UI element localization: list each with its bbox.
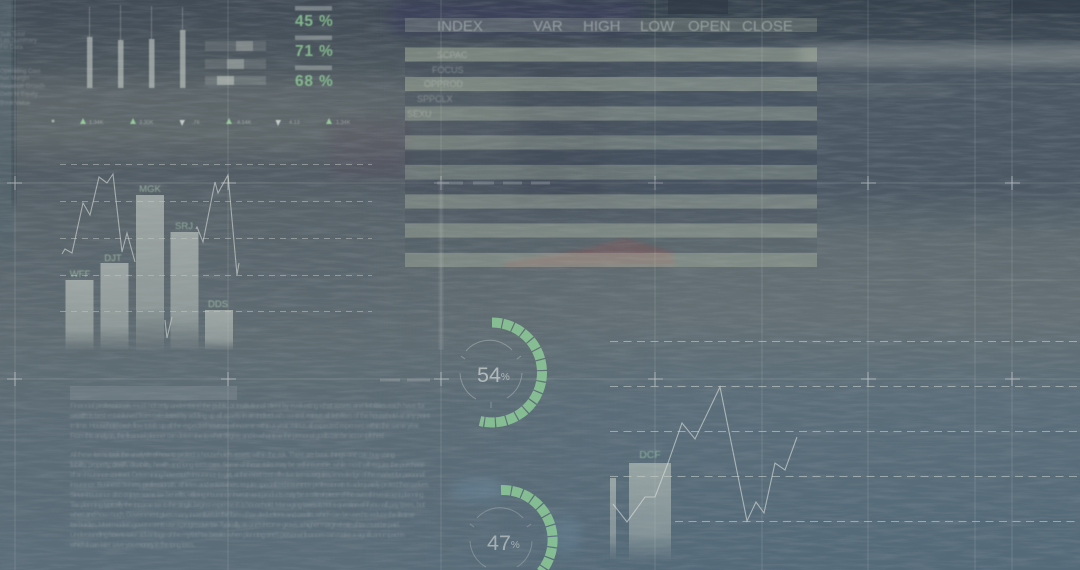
panel: ticker row: .76 [192, 120, 200, 126]
text block: financial planning copy: in time. Household cash flow totals up all the expected sources of income within a year, minus all expected expenses within the same year. [70, 422, 420, 430]
table header: VAR [533, 18, 563, 35]
bar labels: DDS [208, 299, 228, 310]
table row labels: FOCUS [432, 65, 464, 75]
chart: right bar and line chart [610, 342, 1080, 562]
segmented arc [480, 322, 542, 422]
text block: financial planning copy: liability, property, death, disability, health and long-term care. Some of these risks may be self-insurable, while most will require the purchase [70, 461, 425, 469]
gauge value: % [511, 540, 520, 551]
text block: financial planning copy: which it can later save you money in the long term. [69, 541, 195, 549]
panel: ticker row: 1.34K [336, 120, 351, 126]
panel: sidebar faint notes: Las Summary [0, 38, 37, 44]
panel: ticker row [52, 118, 351, 126]
text block: financial planning copy: All these items took the analysis of how to protect a household's assets within the risk. There are basic things one can buy using [70, 451, 395, 459]
text block: financial planning copy: of an insurance contract. Determining how much insurance to get, at the most cost effective terms requires knowledge of the market for personal [70, 471, 425, 479]
panel: percentage readouts [295, 6, 334, 90]
bar labels: DJT [104, 253, 122, 264]
bar labels: MGK [139, 184, 161, 195]
gauge: 54 percent [460, 322, 542, 422]
panel: sidebar faint notes: Fin Data [0, 45, 23, 51]
table header [437, 18, 793, 35]
gauge: 47 percent [470, 490, 553, 570]
table footer dashes [437, 182, 550, 184]
text block: financial planning copy: Since insurance also enjoys some tax benefits, utilizing insurance investment products may be a critical piece of the overall investment planning. [70, 491, 425, 499]
panel: sidebar faint notes: Book Value [0, 101, 31, 107]
panel: ticker row: 3.30K [139, 120, 154, 126]
gauge value: % [501, 372, 510, 383]
bars [610, 463, 671, 562]
text block: financial planning copy: wealth is best established from calculated by adding up all assets in an individual's control, minus all liabilities of the household at any point [69, 412, 430, 420]
text block: financial planning copy: insurance. Business owners, professionals, athletes and entertainers require specialized insurance professionals to adequately protect themselves. [70, 481, 430, 489]
chart: left bar and line chart [60, 164, 372, 350]
table row labels: SCPAC [437, 50, 468, 60]
text block: financial planning copy: From this analysis, the financial planner can determine to what degree and in what time the personal goals can be accomplished. [70, 432, 385, 440]
panel: percentage readouts: 71 % [295, 43, 334, 60]
panel: ticker row: 4.13 [289, 120, 300, 126]
table header: CLOSE [742, 18, 793, 35]
panel: sidebar faint notes: Operating Cost [0, 69, 41, 75]
panel: sidebar faint notes [0, 32, 45, 107]
trend line [62, 174, 239, 338]
text block: financial planning copy: Tax planning typically the income tax is the single largest expense in a household. Managing taxes is not a question of if you will pay taxes, but [70, 501, 425, 509]
text block: financial planning copy: tax burden. Most modern governments use a progressive tax. Typically, as one's income grows, a higher marginal rate of tax must be paid. [70, 521, 400, 529]
panel: sidebar faint notes: Revenue Growth [0, 84, 45, 90]
panel: ticker row: 4.14K [237, 120, 252, 126]
table header: INDEX [437, 18, 483, 35]
table header: OPEN [688, 18, 731, 35]
panel: percentage readouts: 45 % [295, 13, 334, 30]
text block: financial planning copy: when and how much. Government gives many incentives in the form of tax deductions and credits, which can be used to reduce the lifetime [69, 511, 415, 519]
table row labels: OPPROD [424, 79, 464, 89]
gauge value: 47 [487, 531, 511, 555]
text block: financial planning copy [69, 386, 430, 549]
panel: sidebar faint notes: Net Margin [0, 76, 29, 82]
text block: financial planning copy: Understanding how to take advantage of the myriad tax breaks when planning one's personal finances can make a significant impact in [70, 531, 405, 539]
table header: HIGH [583, 18, 620, 35]
table rows [405, 48, 817, 267]
panel: market index table [405, 18, 817, 267]
trend line [613, 387, 797, 522]
bars [66, 195, 233, 350]
panel: sidebar faint notes: Sub Total [0, 32, 25, 38]
bar labels: WFF [70, 269, 90, 280]
panel: horizontal range bars [205, 41, 266, 85]
bar labels [70, 184, 228, 310]
bar labels: SRJ [175, 221, 193, 232]
inner ring [470, 508, 532, 567]
connector dashes beside left gauge [380, 378, 430, 382]
gauge value: 54 [477, 363, 501, 387]
inner ring [460, 340, 522, 408]
table header: LOW [640, 18, 675, 35]
dashed gridlines [610, 342, 1080, 522]
text block: financial planning copy: Financial professionals must not only understand the public or institutional client by evaluating what assets and liabilities each have for [70, 402, 426, 410]
table row labels: SPPCLX [417, 94, 453, 104]
panel: mini column chart [87, 5, 186, 88]
table row labels: SEXU [407, 109, 432, 119]
panel: ticker row: 1.34K [89, 120, 104, 126]
dashed gridlines [60, 164, 372, 312]
panel: percentage readouts: 68 % [295, 73, 334, 90]
segmented arc [501, 490, 553, 570]
table row labels [407, 50, 468, 119]
bar label: DCF [639, 449, 661, 461]
panel: sidebar faint notes: Debt to Equity [0, 92, 38, 98]
